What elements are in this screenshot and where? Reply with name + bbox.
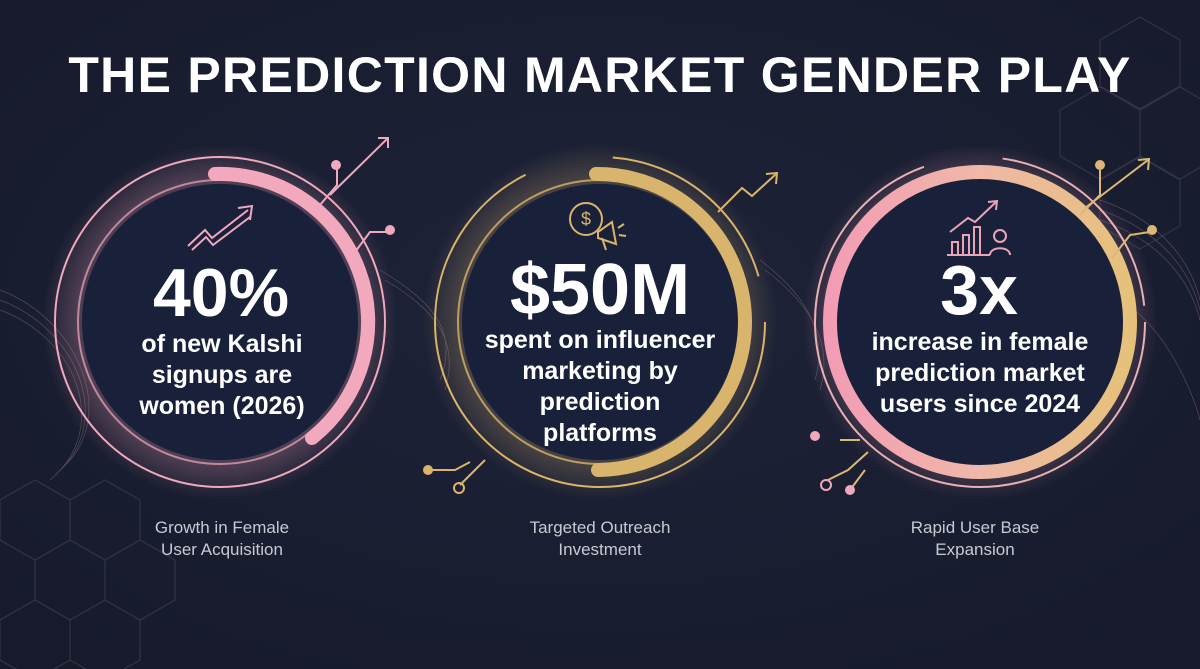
panel: user growth: 3x <box>940 251 1018 329</box>
panel: influencer spend: platforms <box>543 419 657 447</box>
panel: influencer spend: prediction <box>540 388 660 416</box>
panel: user growth <box>802 144 1158 500</box>
panel: female signups: signups are <box>152 361 292 389</box>
panel: female signups: of new Kalshi <box>141 330 303 358</box>
panel: influencer spend: spent on influencer <box>485 326 716 354</box>
title: THE PREDICTION MARKET GENDER PLAY <box>68 47 1132 103</box>
caption 2: Investment <box>558 540 642 559</box>
panel: influencer spend <box>422 144 778 500</box>
caption 3: Expansion <box>935 540 1015 559</box>
thick arc <box>215 174 368 438</box>
panel: female signups: women (2026) <box>138 392 305 420</box>
panel: influencer spend: marketing by <box>522 357 678 385</box>
panel: user growth: users since 2024 <box>880 390 1080 418</box>
caption 1: Growth in Female <box>155 518 289 537</box>
panel: female signups: 40% <box>153 255 289 331</box>
caption 1: User Acquisition <box>161 540 283 559</box>
icon: dollar megaphone <box>570 203 626 250</box>
caption 3: Rapid User Base <box>911 518 1039 537</box>
icon: bar chart with woman <box>947 201 1010 255</box>
panel: influencer spend: $ <box>581 209 591 229</box>
caption 2: Targeted Outreach <box>530 518 670 537</box>
panel: user growth: prediction market <box>875 359 1086 387</box>
circuit arrows <box>320 138 388 252</box>
panel: user growth: increase in female <box>872 328 1088 356</box>
icon: trend arrow <box>188 206 252 250</box>
panel: female signups <box>42 138 398 500</box>
decorative wave lines <box>0 200 1200 480</box>
panel: influencer spend: $50M <box>510 250 690 330</box>
